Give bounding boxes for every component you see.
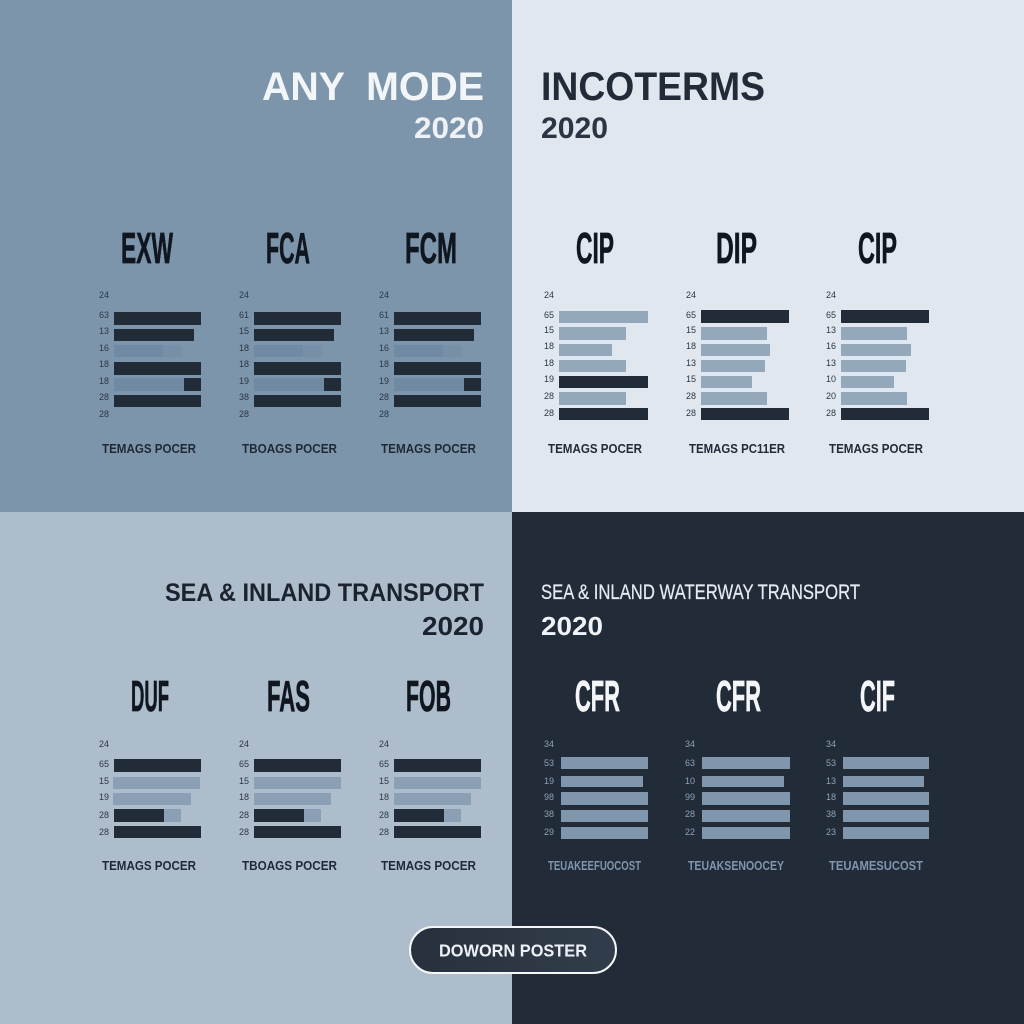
term column: CFR: 38 <box>544 809 554 819</box>
button: download poster: DOWORN POSTER <box>439 940 587 960</box>
term column: DUF: 28 <box>99 810 109 820</box>
term column: EXW: 63 <box>99 310 109 320</box>
term column: FCA: 19 <box>239 376 249 386</box>
term column: EXW: EXW <box>121 224 173 273</box>
term column: FCA: 15 <box>239 326 249 336</box>
term column: CIP: 18 <box>544 358 554 368</box>
term column: CFR: TEUAKEEFUOCOST <box>548 859 641 873</box>
term column: CIP: 18 <box>544 341 554 351</box>
term column: FAS: 65 <box>239 759 249 769</box>
term column: CFR second: 28 <box>685 809 695 819</box>
term column: EXW: 28 <box>99 392 109 402</box>
term column: FOB: TEMAGS POCER <box>381 859 476 873</box>
term column: EXW: 18 <box>99 359 109 369</box>
term column: CIF: 34 <box>826 739 836 749</box>
term column: FOB: 28 <box>379 810 389 820</box>
term column: FCM: 16 <box>379 343 389 353</box>
term column: EXW: 18 <box>99 376 109 386</box>
term column: CIP <box>544 224 648 456</box>
term column: FAS <box>239 672 341 873</box>
term column: CIF: 23 <box>826 827 836 837</box>
term column: DIP: TEMAGS PC11ER <box>689 442 785 456</box>
term column: EXW: TEMAGS POCER <box>102 442 196 456</box>
term column: FCA: 24 <box>239 290 249 300</box>
term column: CFR: 53 <box>544 758 554 768</box>
term column: FCM: 28 <box>379 392 389 402</box>
term column: DUF <box>99 672 201 873</box>
term column: FCM <box>379 224 481 456</box>
term column: CFR: 98 <box>544 792 554 802</box>
term column: CIP second: TEMAGS POCER <box>829 442 923 456</box>
term column: CIF: 13 <box>826 776 836 786</box>
term column: FCA: FCA <box>266 224 310 273</box>
year: any mode: 2020 <box>414 112 484 145</box>
term column: FAS: 18 <box>239 792 249 802</box>
term column: DUF: 15 <box>99 776 109 786</box>
term column: FOB <box>379 672 481 873</box>
term column: CIF: 38 <box>826 809 836 819</box>
term column: DIP: 13 <box>686 358 696 368</box>
term column: FOB: 28 <box>379 827 389 837</box>
panel: any mode <box>0 0 512 512</box>
term column: DUF: TEMAGS POCER <box>102 859 196 873</box>
term column: CIP: 15 <box>544 325 554 335</box>
term column: FOB: FOB <box>406 672 451 721</box>
term column: CIF <box>826 672 929 873</box>
term column: CFR <box>544 672 648 873</box>
term column: CIP: 65 <box>544 310 554 320</box>
term column: DUF: 65 <box>99 759 109 769</box>
term column: CFR second: TEUAKSENOOCEY <box>688 859 785 873</box>
term column: FCM: 28 <box>379 409 389 419</box>
term column: CIP second: 16 <box>826 341 836 351</box>
term column: CFR second: 22 <box>685 827 695 837</box>
term column: CIP: 19 <box>544 374 554 384</box>
term column: FAS: 15 <box>239 776 249 786</box>
term column: CFR second: 10 <box>685 776 695 786</box>
term column: CFR second: CFR <box>716 672 761 721</box>
term column: EXW <box>99 224 201 456</box>
term column: FAS: FAS <box>267 672 310 721</box>
term column: CFR: 19 <box>544 776 554 786</box>
term column: CIF: TEUAMESUCOST <box>829 859 923 873</box>
term column: DUF: 24 <box>99 739 109 749</box>
term column: DIP: DIP <box>716 224 757 273</box>
term column: EXW: 24 <box>99 290 109 300</box>
term column: CIP second: 10 <box>826 374 836 384</box>
panel: sea and inland transport <box>0 512 512 1024</box>
term column: CIP: 24 <box>544 290 554 300</box>
term column: CIP second: CIP <box>858 224 897 273</box>
term column: FCA: 18 <box>239 359 249 369</box>
term column: EXW: 28 <box>99 409 109 419</box>
term column: CIP second: 24 <box>826 290 836 300</box>
heading: incoterms: INCOTERMS <box>541 65 765 109</box>
term column: CIP second: 28 <box>826 408 836 418</box>
term column: FCM: 19 <box>379 376 389 386</box>
term column: CIF: 53 <box>826 758 836 768</box>
term column: FCM: FCM <box>405 224 457 273</box>
term column: FAS: 28 <box>239 827 249 837</box>
term column: FCM: 18 <box>379 359 389 369</box>
panel: sea and inland waterway transport <box>512 512 1024 1024</box>
term column: FAS: TBOAGS POCER <box>242 859 337 873</box>
term column: CIP: CIP <box>576 224 614 273</box>
term column: CIP second: 13 <box>826 358 836 368</box>
term column: FOB: 24 <box>379 739 389 749</box>
term column: CIP: TEMAGS POCER <box>548 442 642 456</box>
term column: FCA <box>239 224 341 456</box>
term column: CIP second: 13 <box>826 325 836 335</box>
heading: sea and inland transport: SEA & INLAND TRANSPORT <box>165 579 484 607</box>
term column: FCA: 28 <box>239 409 249 419</box>
panel: incoterms <box>512 0 1024 512</box>
term column: FOB: 65 <box>379 759 389 769</box>
term column: FCA: 38 <box>239 392 249 402</box>
term column: CIP second: 65 <box>826 310 836 320</box>
term column: DUF: 28 <box>99 827 109 837</box>
term column: CIP: 28 <box>544 391 554 401</box>
term column: FCA: 18 <box>239 343 249 353</box>
year: incoterms: 2020 <box>541 112 608 145</box>
term column: DIP: 15 <box>686 325 696 335</box>
heading: any mode: ANY MODE <box>262 65 484 109</box>
term column: CFR: 34 <box>544 739 554 749</box>
term column: FAS: 24 <box>239 739 249 749</box>
term column: FCM: 24 <box>379 290 389 300</box>
term column: DUF: DUF <box>131 672 169 721</box>
term column: DIP: 65 <box>686 310 696 320</box>
year: sea and inland transport: 2020 <box>422 611 484 641</box>
term column: CFR: 29 <box>544 827 554 837</box>
button: download poster <box>410 927 616 973</box>
heading: sea and inland waterway transport: SEA & INLAND WATERWAY TRANSPORT <box>541 581 860 604</box>
term column: DIP: 28 <box>686 391 696 401</box>
term column: CIP second <box>826 224 929 456</box>
term column: CIP: 28 <box>544 408 554 418</box>
term column: FAS: 28 <box>239 810 249 820</box>
term column: EXW: 16 <box>99 343 109 353</box>
term column: FCM: TEMAGS POCER <box>381 442 476 456</box>
term column: FOB: 18 <box>379 792 389 802</box>
term column: CIF: 18 <box>826 792 836 802</box>
term column: CFR second: 99 <box>685 792 695 802</box>
term column: EXW: 13 <box>99 326 109 336</box>
term column: FCA: TBOAGS POCER <box>242 442 337 456</box>
term column: CFR second <box>685 672 790 873</box>
term column: DIP: 24 <box>686 290 696 300</box>
term column: FCM: 13 <box>379 326 389 336</box>
term column: CFR second: 63 <box>685 758 695 768</box>
term column: DIP: 18 <box>686 341 696 351</box>
term column: DUF: 19 <box>99 792 109 802</box>
term column: DIP: 28 <box>686 408 696 418</box>
term column: FCA: 61 <box>239 310 249 320</box>
term column: CIF: CIF <box>860 672 895 721</box>
term column: CIP second: 20 <box>826 391 836 401</box>
term column: DIP <box>686 224 789 456</box>
term column: DIP: 15 <box>686 374 696 384</box>
term column: FOB: 15 <box>379 776 389 786</box>
term column: CFR second: 34 <box>685 739 695 749</box>
term column: CFR: CFR <box>575 672 620 721</box>
term column: FCM: 61 <box>379 310 389 320</box>
year: sea and inland waterway transport: 2020 <box>541 611 603 641</box>
